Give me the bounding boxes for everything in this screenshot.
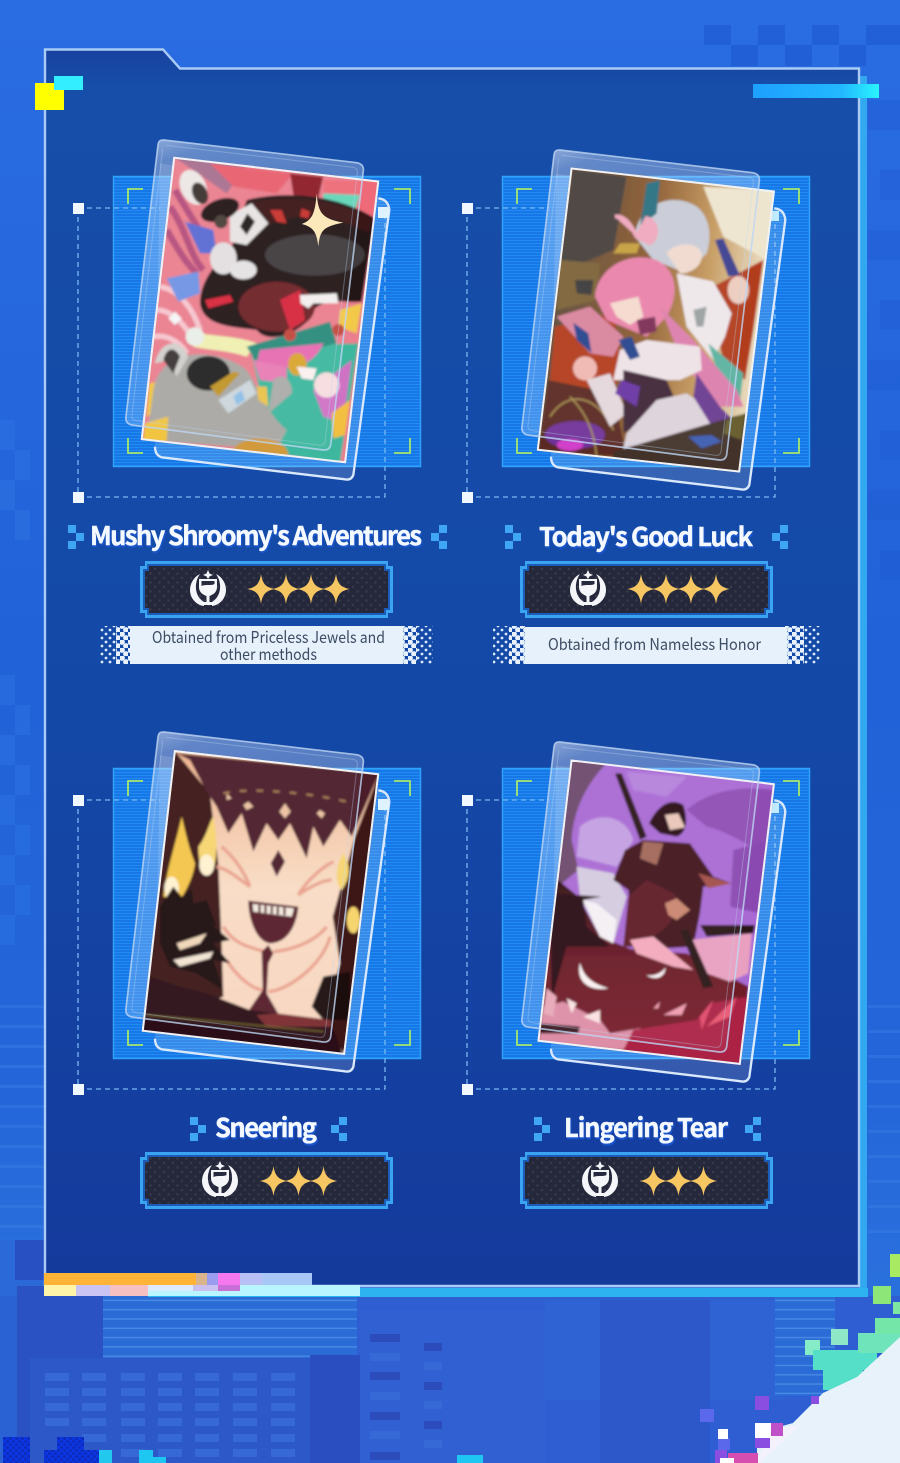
figure — [615, 773, 647, 840]
front plastic sleeve — [126, 140, 363, 450]
card 2 group: Today's Good Luck — [462, 150, 820, 664]
front plastic sleeve — [522, 150, 759, 460]
title: Today's Good Luck — [539, 517, 754, 554]
title — [190, 1108, 347, 1145]
rating bar — [520, 561, 773, 618]
backing scanline panel — [502, 768, 810, 1058]
title: Lingering Tear — [564, 1108, 729, 1145]
source note — [100, 624, 433, 665]
lower scene — [250, 343, 358, 463]
source note: Obtained from Priceless Jewels and — [152, 624, 385, 648]
rear plastic sleeve — [126, 140, 389, 480]
building windows — [45, 1353, 442, 1457]
backing scanline panel — [114, 176, 420, 466]
dashed guide — [462, 795, 775, 1095]
card 3 group: Sneering — [73, 732, 420, 1209]
front plastic sleeve — [522, 742, 759, 1052]
background stripes: lower sides — [0, 1005, 900, 1233]
front plastic sleeve — [126, 732, 363, 1042]
background pixel checker: left side — [0, 420, 30, 945]
dashed guide — [462, 203, 775, 503]
pixel blocks at the bottom edge — [3, 1437, 483, 1463]
card 4 group: Lingering Tear — [462, 742, 810, 1209]
main frame panel — [44, 49, 868, 1297]
rear plastic sleeve — [522, 150, 785, 490]
artwork: mushroom and rabbits — [137, 153, 383, 472]
corner crystal, lower right — [700, 1254, 900, 1463]
rear plastic sleeve — [522, 742, 785, 1082]
rating bar — [140, 561, 393, 618]
artwork: hooded figure — [533, 757, 780, 1070]
rear plastic sleeve — [126, 732, 389, 1072]
rating bar — [520, 1152, 773, 1209]
source note: Obtained from Nameless Honor — [548, 631, 762, 655]
artwork: chalice — [140, 747, 387, 1060]
bottom cityscape — [0, 1240, 900, 1463]
rating bar — [140, 1152, 393, 1209]
corner accent: yellow and cyan blocks — [35, 76, 83, 110]
backing scanline panel — [502, 176, 810, 466]
title: Sneering — [215, 1108, 317, 1145]
dashed guide — [73, 795, 385, 1095]
backing scanline panel — [114, 768, 420, 1058]
source note — [493, 626, 820, 664]
pink haired girl — [595, 257, 675, 337]
source note: other methods — [220, 641, 317, 665]
card 1 group: Mushy Shroomy's Adventures — [68, 140, 447, 665]
background pixel checker: top right — [704, 25, 900, 580]
dashed guide — [73, 203, 385, 503]
corner accent: cyan pixel bar — [753, 84, 879, 98]
title: Mushy Shroomy's Adventures — [90, 516, 422, 553]
silver haired woman — [635, 200, 709, 273]
foliage — [538, 1000, 642, 1050]
glitch bar, lower left — [44, 1273, 360, 1296]
artwork: two girls with cards — [533, 163, 780, 477]
